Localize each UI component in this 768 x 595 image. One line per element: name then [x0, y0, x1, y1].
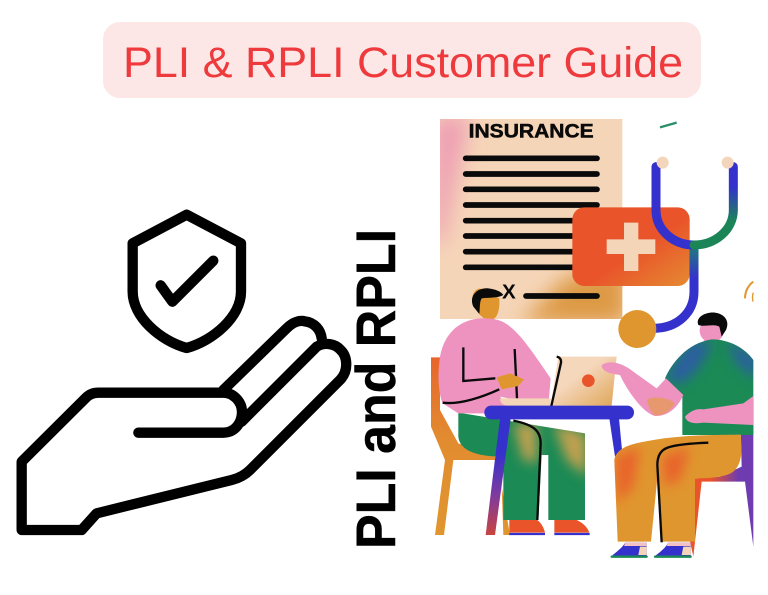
icon: open hand: [22, 321, 346, 530]
insurance document: [433, 117, 627, 323]
stethoscope: [618, 123, 753, 348]
vertical label: PLI and RPLI: PLI and RPLI: [344, 229, 407, 549]
laptop: [500, 357, 617, 406]
insurance document: X: [502, 281, 516, 304]
icon: shield with check: [133, 215, 241, 348]
right chair: [690, 397, 753, 557]
title banner: [103, 22, 701, 98]
left chair: [431, 357, 510, 535]
seated customer: [439, 288, 590, 534]
table: [484, 406, 634, 535]
insurance document: INSURANCE: [469, 121, 594, 142]
title banner: PLI & RPLI Customer Guide: [123, 39, 683, 87]
medical cross card: [572, 207, 690, 286]
consultation scene: [431, 288, 757, 557]
advisor: [602, 313, 757, 557]
icon: hand holding shield: [22, 215, 346, 530]
illustration: insurance consultation: [431, 117, 757, 557]
